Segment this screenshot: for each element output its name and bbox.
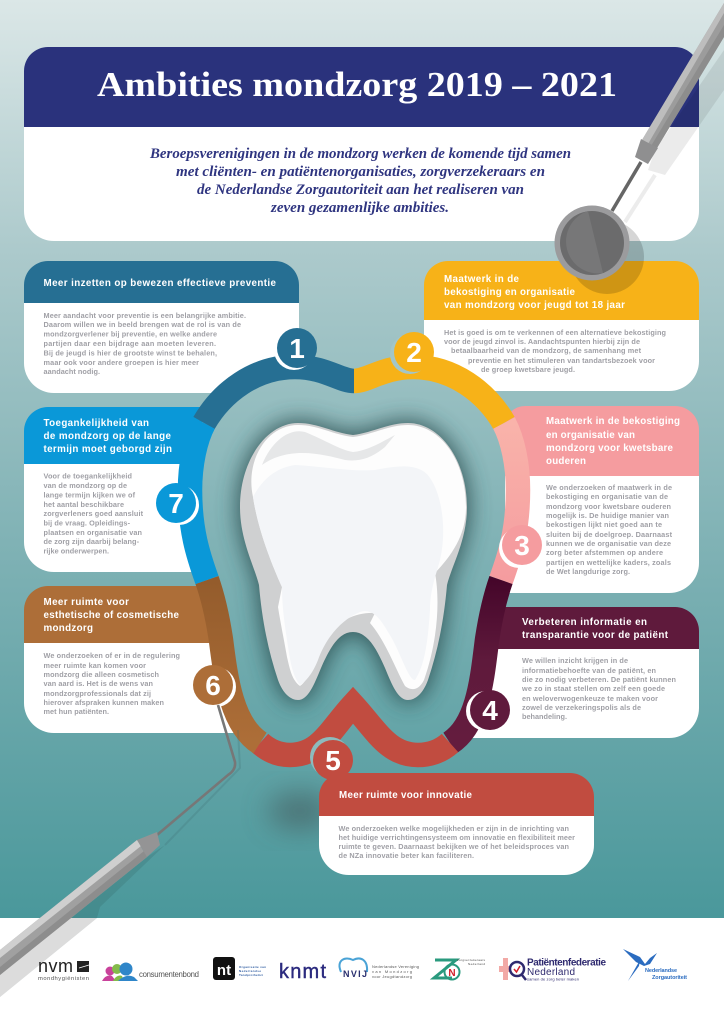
panel 7: toegankelijkheid: plaatsen en organisatie van <box>44 528 142 537</box>
panel 4: informatie en transparantie: en weloverwogenkeuze te maken voor <box>522 694 658 703</box>
footer band <box>0 918 724 1024</box>
panel 3: maatwerk ouderen: We onderzoeken of maatwerk in de <box>546 483 672 492</box>
panel 3: maatwerk ouderen: Maatwerk in de bekostiging <box>546 416 680 427</box>
number badge 1: 1 <box>289 333 305 364</box>
intro text: de Nederlandse Zorgautoriteit aan het realiseren van <box>197 182 524 198</box>
panel 6: esthetische mondzorg: We onderzoeken of er in de regulering <box>44 651 180 660</box>
panel 3: maatwerk ouderen: ouderen <box>546 456 586 467</box>
dental probe <box>0 705 240 997</box>
panel 7: toegankelijkheid: rijke onderwerpen. <box>44 546 109 556</box>
intro text: zeven gezamenlijke ambities. <box>270 200 449 216</box>
logo: organisatie van tandprothetici <box>213 957 266 980</box>
panel 3: maatwerk ouderen: partijen en wettelijke kaders, zoals <box>546 558 671 567</box>
panel 7: toegankelijkheid: Toegankelijkheid van <box>44 418 149 429</box>
logo: nederlandse zorgautoriteit <box>623 949 687 981</box>
panel 2: maatwerk jeugd: preventie en het stimuleren van tandartsbezoek voor <box>468 356 655 365</box>
ring segment 3 <box>501 423 518 580</box>
tooth <box>240 423 467 700</box>
ring segment 5 <box>260 705 450 755</box>
panel 1: preventie: Meer inzetten op bewezen effectieve preventie <box>44 278 277 289</box>
panel 1: preventie: Bij de jeugd is hier de grootste winst te behalen, <box>44 348 217 358</box>
header panel <box>24 47 699 241</box>
number badge 6 <box>193 665 236 707</box>
logo: nvm mondhygiënisten <box>38 956 89 982</box>
panel 6: esthetische mondzorg: mondzorg die alleen cosmetisch <box>44 670 159 679</box>
panel 6: esthetische mondzorg: met hun patiënten. <box>44 707 109 716</box>
logo: nvij: voor Jeugdtandzorg <box>372 974 412 979</box>
number badge 6: 6 <box>205 670 221 701</box>
logo: organisatie van tandprothetici: Tandprothetici <box>239 973 263 977</box>
logo: zn: Zorgverzekeraars <box>457 958 486 962</box>
panel 4: informatie en transparantie: die zo nodig verbeteren. De patiënt kunnen <box>522 675 676 684</box>
logo: patiëntenfederatie nederland: Patiëntenfederatie <box>527 958 606 968</box>
panel 1: preventie: partijen daar een bijdrage aan moeten leveren. <box>44 339 216 348</box>
panel 7: toegankelijkheid: de mondzorg op de lange <box>44 431 172 442</box>
panel 4: informatie en transparantie: transparantie voor de patiënt <box>522 630 669 641</box>
panel 3: maatwerk ouderen <box>505 406 699 593</box>
panel 4: informatie en transparantie: we zo in staat stellen om zelf een goede <box>521 684 665 693</box>
panel 7: toegankelijkheid: het aantal beschikbare <box>44 500 124 509</box>
logo: organisatie van tandprothetici: nt <box>217 962 231 979</box>
logo: organisatie van tandprothetici: Nederlandse <box>239 969 261 973</box>
intro text <box>149 146 571 216</box>
panel 7: toegankelijkheid: van de mondzorg op de <box>44 481 127 490</box>
logo: nederlandse zorgautoriteit: Nederlandse <box>645 968 677 974</box>
panel 3: maatwerk ouderen: sluiten bij de doelgroep. Daarnaast <box>546 530 673 539</box>
panel 5: innovatie: het huidige verrichtingensysteem om innovatie en flexibiliteit meer <box>338 833 575 842</box>
number badge 3: 3 <box>514 530 530 561</box>
tooth-shaped ring <box>190 367 518 755</box>
logo: patiëntenfederatie nederland: samen de zorg beter maken <box>527 976 579 982</box>
dental mirror <box>554 3 724 294</box>
panel 1: preventie: maar ook voor andere groepen is hier meer <box>44 358 199 367</box>
number badge 4: 4 <box>482 695 498 726</box>
panel 3: maatwerk ouderen: mondzorg voor kwetsbare <box>546 443 674 454</box>
number badge 2: 2 <box>406 337 422 368</box>
panel 1: preventie: mondzorgverlener bij preventie, en welke andere <box>44 330 217 338</box>
panel 3: maatwerk ouderen: zorg beter afstemmen op andere <box>546 548 663 557</box>
logo: nvij <box>340 958 419 979</box>
panel 4: informatie en transparantie <box>465 607 699 738</box>
panel 3: maatwerk ouderen: en organisatie van <box>546 430 635 441</box>
panel 6: esthetische mondzorg: mondzorg <box>44 623 93 634</box>
panel 1: preventie <box>24 261 299 393</box>
panel 2: maatwerk jeugd: bekostiging en organisatie <box>444 287 576 298</box>
title: Ambities mondzorg 2019 – 2021 <box>97 65 617 104</box>
panel 4: informatie en transparantie: behandeling. <box>522 712 567 721</box>
panel 4: informatie en transparantie: zowel de verzekeringspolis als de <box>522 703 641 712</box>
instrument shadow smudge <box>268 793 332 829</box>
ring segment 1 <box>204 367 354 423</box>
panel 3: maatwerk ouderen: mogelijk is. De huidige manier van <box>546 511 669 520</box>
intro text: Beroepsverenigingen in de mondzorg werken de komende tijd samen <box>149 146 571 162</box>
number badge 7: 7 <box>168 488 184 519</box>
panel 7: toegankelijkheid: lange termijn kijken we of <box>44 490 136 500</box>
panel 6: esthetische mondzorg: Meer ruimte voor <box>44 597 129 608</box>
panel 5: innovatie: We onderzoeken welke mogelijkheden er zijn in de inrichting van <box>338 824 569 833</box>
panel 6: esthetische mondzorg: van aard is. Het is de wens van <box>44 679 153 688</box>
number badge 3 <box>499 525 542 568</box>
panel 5: innovatie: de NZa innovatie beter kan faciliteren. <box>338 851 474 860</box>
tooth shadow <box>240 423 467 700</box>
number badge 4 <box>466 690 510 731</box>
logo: patiëntenfederatie nederland: Nederland <box>527 967 575 978</box>
logo: patiëntenfederatie nederland <box>499 958 606 982</box>
ring segment 4 <box>450 580 501 743</box>
panel 2: maatwerk jeugd: Het is goed is om te verkennen of een alternatieve bekostiging <box>444 328 666 337</box>
panel 7: toegankelijkheid: termijn moet geborgd zijn <box>44 444 172 455</box>
logo: consumentenbond: consumentenbond <box>139 970 199 979</box>
panel 6: esthetische mondzorg: meer ruimte kan komen voor <box>44 661 146 670</box>
panel 4: informatie en transparantie: We willen inzicht krijgen in de <box>522 656 628 665</box>
panel 2: maatwerk jeugd: de groep kwetsbare jeugd. <box>481 365 575 374</box>
panel 6: esthetische mondzorg <box>24 586 240 733</box>
number badge 7 <box>156 483 199 525</box>
number badge 2 <box>390 332 434 374</box>
intro text: met cliënten- en patiëntenorganisaties, zorgverzekeraars en <box>176 164 545 180</box>
panel 5: innovatie <box>319 773 594 875</box>
panel 4: informatie en transparantie: Verbeteren informatie en <box>522 617 647 628</box>
panel 6: esthetische mondzorg: mondzorgprofessionals dat zij <box>44 689 151 698</box>
panel 6: esthetische mondzorg: hierover afspraken kunnen maken <box>44 698 164 707</box>
ring segment 6 <box>207 580 260 743</box>
panel 2: maatwerk jeugd: van mondzorg voor jeugd tot 18 jaar <box>444 300 625 311</box>
logo: organisatie van tandprothetici: Organisatie van <box>239 965 266 969</box>
logo: zn: Nederland <box>468 962 485 966</box>
logo: knmt: knmt <box>279 961 326 983</box>
number badge 5 <box>310 737 353 780</box>
logo: nvm mondhygiënisten: mondhygiënisten <box>38 976 89 982</box>
logo: nvij: Nederlandse Vereniging <box>372 964 419 969</box>
panel 3: maatwerk ouderen: de Wet langdurige zorg. <box>546 567 630 576</box>
number badge 1 <box>274 328 317 370</box>
logo: nvm mondhygiënisten: nvm <box>38 956 73 976</box>
panel 5: innovatie: Meer ruimte voor innovatie <box>339 790 473 801</box>
logo: zn: N <box>448 968 456 979</box>
ring segment 2 <box>354 367 504 423</box>
panel 3: maatwerk ouderen: bekostiging en organisatie van de <box>546 492 668 501</box>
logo: nvij: van Mondzorg <box>372 969 412 974</box>
panel 2: maatwerk jeugd: betaalbaarheid van de mondzorg, de samenhang met <box>451 346 642 355</box>
panel 7: toegankelijkheid: zorgverleners goed aansluit <box>44 509 144 518</box>
panel 4: informatie en transparantie: informatiebehoefte van de patiënt, en <box>522 666 656 675</box>
panel 1: preventie: Meer aandacht voor preventie is een belangrijke ambitie. <box>44 311 246 320</box>
panel 2: maatwerk jeugd: voor de jeugd zinvol is. Aandachtspunten hierbij zijn de <box>444 337 640 346</box>
panel 3: maatwerk ouderen: mondzorg voor kwetsbare ouderen <box>546 502 671 511</box>
panel 7: toegankelijkheid: bij de vraag. Opleidings- <box>44 518 131 528</box>
ring segment 7 <box>190 423 207 580</box>
panel 7: toegankelijkheid: de zorg zijn daarbij belang- <box>44 537 140 546</box>
panel 1: preventie: aandacht nodig. <box>44 367 100 376</box>
panel 2: maatwerk jeugd: Maatwerk in de <box>444 274 520 285</box>
panel 5: innovatie: ruimte te geven. Daarnaast bekijken we of het beleidsproces van <box>338 842 569 851</box>
logo: zn <box>434 958 486 980</box>
panel 1: preventie: Daarom willen we in beeld brengen wat de rol is van de <box>44 320 241 329</box>
number badge 5: 5 <box>325 745 341 776</box>
panel 2: maatwerk jeugd <box>424 261 699 391</box>
logo: nederlandse zorgautoriteit: Zorgautoriteit <box>652 975 687 981</box>
logo: nvij: NVIJ <box>343 969 367 979</box>
panel 3: maatwerk ouderen: kunnen we de organisatie van deze <box>546 539 671 548</box>
panel 3: maatwerk ouderen: bekostigen lijkt niet goed aan te <box>546 520 662 529</box>
panel 6: esthetische mondzorg: esthetische of cosmetische <box>44 610 180 621</box>
logo: consumentenbond <box>102 962 199 981</box>
panel 7: toegankelijkheid: Voor de toegankelijkheid <box>44 472 132 480</box>
panel 7: toegankelijkheid <box>24 407 202 572</box>
